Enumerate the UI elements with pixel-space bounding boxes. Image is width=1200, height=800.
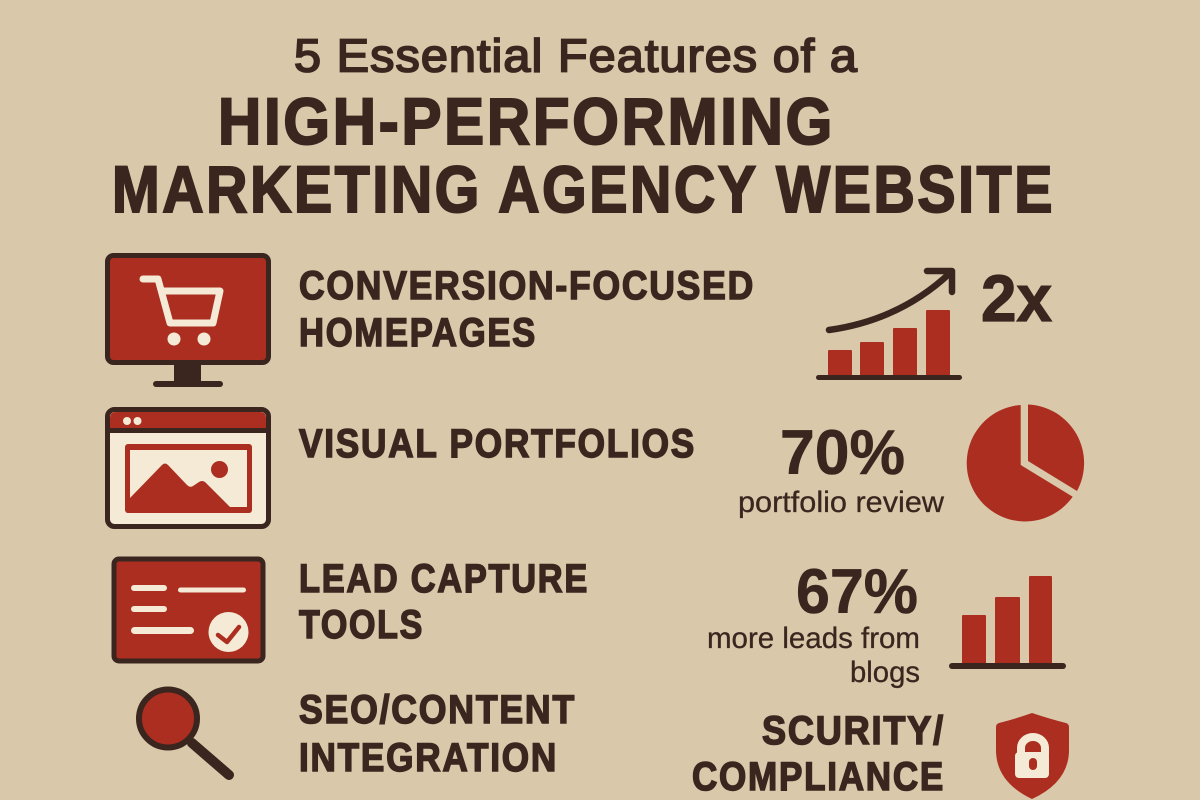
heading: visual portfolios: VISUAL PORTFOLIOS <box>299 422 696 466</box>
icon: lead form with check <box>114 559 263 661</box>
heading: conversion-focused homepages <box>299 264 755 355</box>
title: HIGH-PERFORMING <box>218 84 835 158</box>
heading: lead capture tools: TOOLS <box>299 603 424 647</box>
stat: 2x: 2x <box>981 261 1052 335</box>
icon: browser with image <box>108 410 268 526</box>
icon: shield with lock <box>996 713 1069 799</box>
heading: lead capture tools: LEAD CAPTURE <box>299 557 589 601</box>
heading: conversion-focused homepages: HOMEPAGES <box>299 311 537 355</box>
icon: magnifying glass <box>139 690 229 775</box>
stat: 67% more leads from blogs: blogs <box>850 656 920 689</box>
stat: 67% more leads from blogs: 67% <box>796 557 918 627</box>
icon: monitor with shopping cart <box>108 256 268 387</box>
title: MARKETING AGENCY WEBSITE <box>112 152 1055 226</box>
chart: pie <box>967 404 1084 521</box>
heading: seo/content integration: SEO/CONTENT <box>299 688 576 732</box>
title <box>112 30 1055 226</box>
title: 5 Essential Features of a <box>294 30 858 82</box>
stat: 70% portfolio review <box>738 418 944 519</box>
stat: 67% more leads from blogs <box>707 557 920 689</box>
stat: 67% more leads from blogs: more leads from <box>707 622 920 655</box>
chart: three bars <box>949 576 1066 669</box>
stat: 70% portfolio review: portfolio review <box>738 486 944 519</box>
heading: security/compliance: SCURITY/ <box>762 709 945 753</box>
heading: lead capture tools <box>299 557 589 647</box>
heading: conversion-focused homepages: CONVERSION-FOCUSED <box>299 264 755 308</box>
heading: security/compliance: COMPLIANCE <box>692 755 945 799</box>
stat: 70% portfolio review: 70% <box>780 418 905 488</box>
heading: seo/content integration <box>299 688 576 780</box>
heading: security/compliance <box>692 709 945 799</box>
chart: rising bars with arrow <box>816 271 962 380</box>
heading: seo/content integration: INTEGRATION <box>299 736 558 780</box>
